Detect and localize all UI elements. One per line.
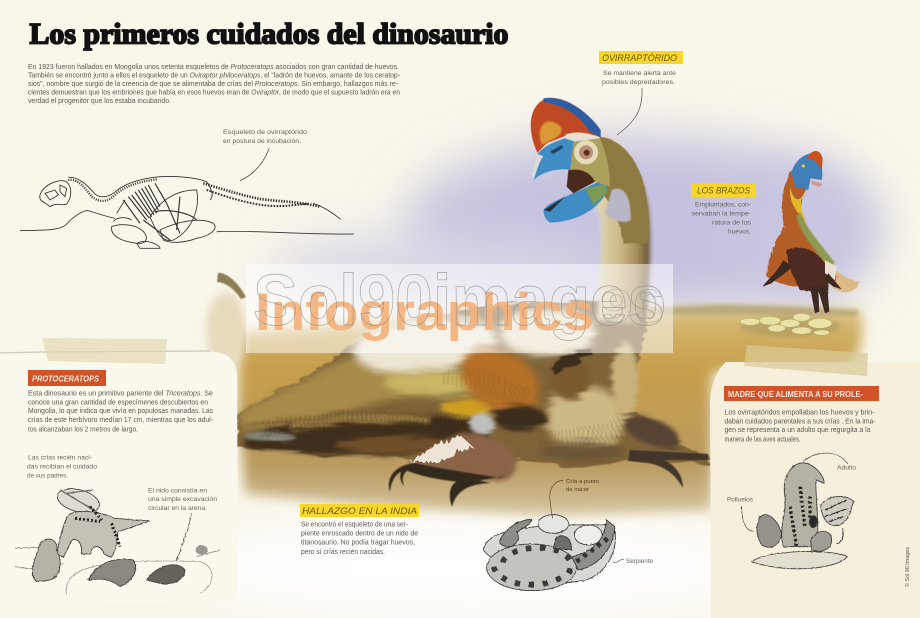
callout: los brazos: ratura de los <box>712 220 752 226</box>
skull <box>40 181 71 207</box>
neck vertebrae <box>68 179 157 201</box>
intro paragraph <box>28 64 400 105</box>
panel text: Esta dinosaurio es un primitivo pariente del Triceratops. Se <box>28 390 213 398</box>
right chick <box>811 531 832 551</box>
leader lines for the snake sketch <box>550 481 624 563</box>
dinosaur head <box>531 98 649 243</box>
upper beak <box>532 138 576 181</box>
intro paragraph: También se encontró junto a ellos el esqueleto de un Oviraptor philoceratops, el "ladrón de huevos, amante de los ceratop- <box>28 72 400 80</box>
hallazgo en la India block <box>300 504 419 556</box>
caption: nest <box>148 488 217 512</box>
label: adult: Adulto <box>837 464 856 472</box>
feathered body mass <box>237 300 708 467</box>
panel text: crías de este herbívoro medían 17 cm, mientras que los adul- <box>28 417 213 424</box>
intro paragraph: sios", nombre que surgió de la creencia de que se alimentaba de crías del Protoceratops. Sin embargo, hallazgos más re- <box>28 81 398 88</box>
adult body <box>782 463 824 547</box>
panel heading: PROTOCERATOPS <box>32 374 99 384</box>
head <box>792 153 822 190</box>
hallazgo en la India block: pero sí crías recién nacidas. <box>301 549 385 556</box>
tail vertebrae <box>203 183 320 207</box>
ribs <box>123 183 167 223</box>
caption: nest: El nido consistía en <box>148 488 207 494</box>
ground line <box>20 211 354 234</box>
leader line <box>240 148 269 181</box>
tail tip behind the paper panel <box>206 273 246 368</box>
eye <box>574 140 598 164</box>
label: chicks: Polluelos <box>727 496 754 504</box>
rock <box>196 545 208 555</box>
tape <box>744 345 868 376</box>
panel text <box>724 410 876 444</box>
sketch: adult with chicks <box>742 453 854 569</box>
eggs nest <box>112 220 215 248</box>
callout: ovirraptorido: Se mantiene alerta ante <box>603 70 676 77</box>
skeleton caption: en postura de incubación. <box>223 138 301 145</box>
olive neck plumage <box>597 137 649 243</box>
caption: hatchlings: de sus padres. <box>27 472 68 480</box>
nest mound <box>752 551 847 569</box>
panel text: daban cuidados parentales a sus crías . En la ima- <box>724 418 876 426</box>
paper panel <box>710 362 920 618</box>
neck and torso <box>767 170 837 287</box>
hallazgo en la India block: HALLAZGO EN LA INDIA <box>302 506 417 517</box>
intro paragraph: En 1923 fueron hallados en Mongolia unos setenta esqueletos de Protoceratops asociados con gran cantidad de huevos. <box>28 64 399 71</box>
panel text: manera de las aves actuales. <box>724 436 801 444</box>
snake neck and head <box>500 519 532 547</box>
tail <box>820 257 859 292</box>
snake coil <box>487 544 577 591</box>
panel heading <box>28 370 106 386</box>
centre hatchling <box>88 559 136 587</box>
label: egg about to hatch <box>566 479 599 493</box>
caption: hatchlings <box>27 454 97 480</box>
back outline <box>160 176 212 200</box>
sketch: protoceratops family <box>15 484 220 595</box>
callout: los brazos <box>691 183 756 236</box>
panel text: gen se representa a un adulto que regurgita a la <box>724 427 871 434</box>
pelvis arch <box>150 190 197 241</box>
hallazgo en la India block: piente enroscado dentro de un nido de <box>301 530 418 538</box>
sandy ground <box>238 304 862 516</box>
callout: ovirraptorido <box>599 51 683 135</box>
callout: los brazos: Emplumados, con- <box>695 202 751 208</box>
panel text: conoce una gran cantidad de especímenes descubiertos en <box>28 400 208 406</box>
left hatchling <box>32 539 60 582</box>
crest <box>531 98 601 153</box>
intro paragraph: cientes demuestran que los embriones que había en esos huevos eran de Oviraptor, de modo que el supuesto ladrón era en <box>28 90 400 96</box>
sketch: snake in nest <box>483 515 615 591</box>
open mouth <box>567 170 595 193</box>
watermark: Sol90images <box>253 261 665 341</box>
callout: ovirraptorido: OVIRRAPTÓRIDO <box>602 53 678 64</box>
caption: hatchlings: das recibían el cuidado <box>27 464 97 470</box>
front arm <box>408 433 516 481</box>
arms <box>763 260 792 287</box>
watermark: 90 <box>600 280 666 332</box>
purple sky haze <box>270 137 875 313</box>
skeleton caption <box>223 129 307 145</box>
panel heading: MADRE QUE ALIMENTA A SU PROLE- <box>728 389 863 399</box>
caption: hatchlings: Las crías recién naci- <box>28 454 92 462</box>
label: egg about to hatch: de nacer <box>566 487 589 493</box>
panel text <box>28 390 214 434</box>
lower jaw <box>543 182 608 223</box>
adult <box>55 484 102 517</box>
credit: © Sol 90 Images <box>904 547 911 587</box>
neck of main dinosaur <box>590 135 650 325</box>
right foot with claw <box>628 450 708 488</box>
panel text: Mongolia, lo que indica que vivía en populosas manadas. Las <box>28 408 214 415</box>
nest of eggs <box>740 313 840 337</box>
wing <box>821 496 854 526</box>
grey throat <box>605 189 631 222</box>
legs <box>810 287 829 313</box>
caption: nest: una simple excavación <box>148 496 217 503</box>
tape <box>42 338 167 364</box>
callout: ovirraptorido: posibles depredadores. <box>602 79 675 86</box>
caption: nest: circular en la arena. <box>148 505 207 512</box>
label: snake: Serpiente <box>626 558 653 565</box>
paper panel <box>0 352 238 607</box>
background oviraptorid <box>763 151 859 313</box>
skeleton caption: Esqueleto de ovirraptórido <box>223 129 307 136</box>
right hatchling <box>147 565 185 584</box>
left chick <box>757 515 782 547</box>
feather strokes <box>265 372 625 441</box>
skeleton drawing <box>20 148 354 248</box>
callout: los brazos: huevos. <box>728 228 751 236</box>
panel text: tos alcanzaban los 2 metros de largo. <box>28 426 138 434</box>
protoceratops panel <box>0 338 238 607</box>
face <box>570 138 610 187</box>
arm claws <box>389 463 505 507</box>
panel text: Los ovirraptóridos empollaban los huevos y brin- <box>724 410 874 416</box>
title: Los primeros cuidados del dinosaurio <box>30 18 508 50</box>
hallazgo en la India block: titanosaurio. No podía tragar huevos, <box>301 540 415 546</box>
parental care panel <box>710 345 920 618</box>
nest <box>483 525 615 583</box>
main oviraptorid body <box>237 300 708 507</box>
callout: los brazos: LOS BRAZOS <box>697 186 751 196</box>
nest hollow <box>66 561 212 595</box>
panel heading <box>724 386 879 401</box>
hallazgo en la India block: Se encontró el esqueleto de una ser- <box>301 522 408 528</box>
intro paragraph: verdad el progenitor que los estaba incubando. <box>28 98 171 105</box>
callout: los brazos: servaban la tempe- <box>692 210 751 218</box>
eggs <box>538 515 569 533</box>
label: egg about to hatch: Cría a punto <box>566 479 599 485</box>
head of egg crack <box>553 536 572 550</box>
watermark: Infographics <box>255 283 594 342</box>
